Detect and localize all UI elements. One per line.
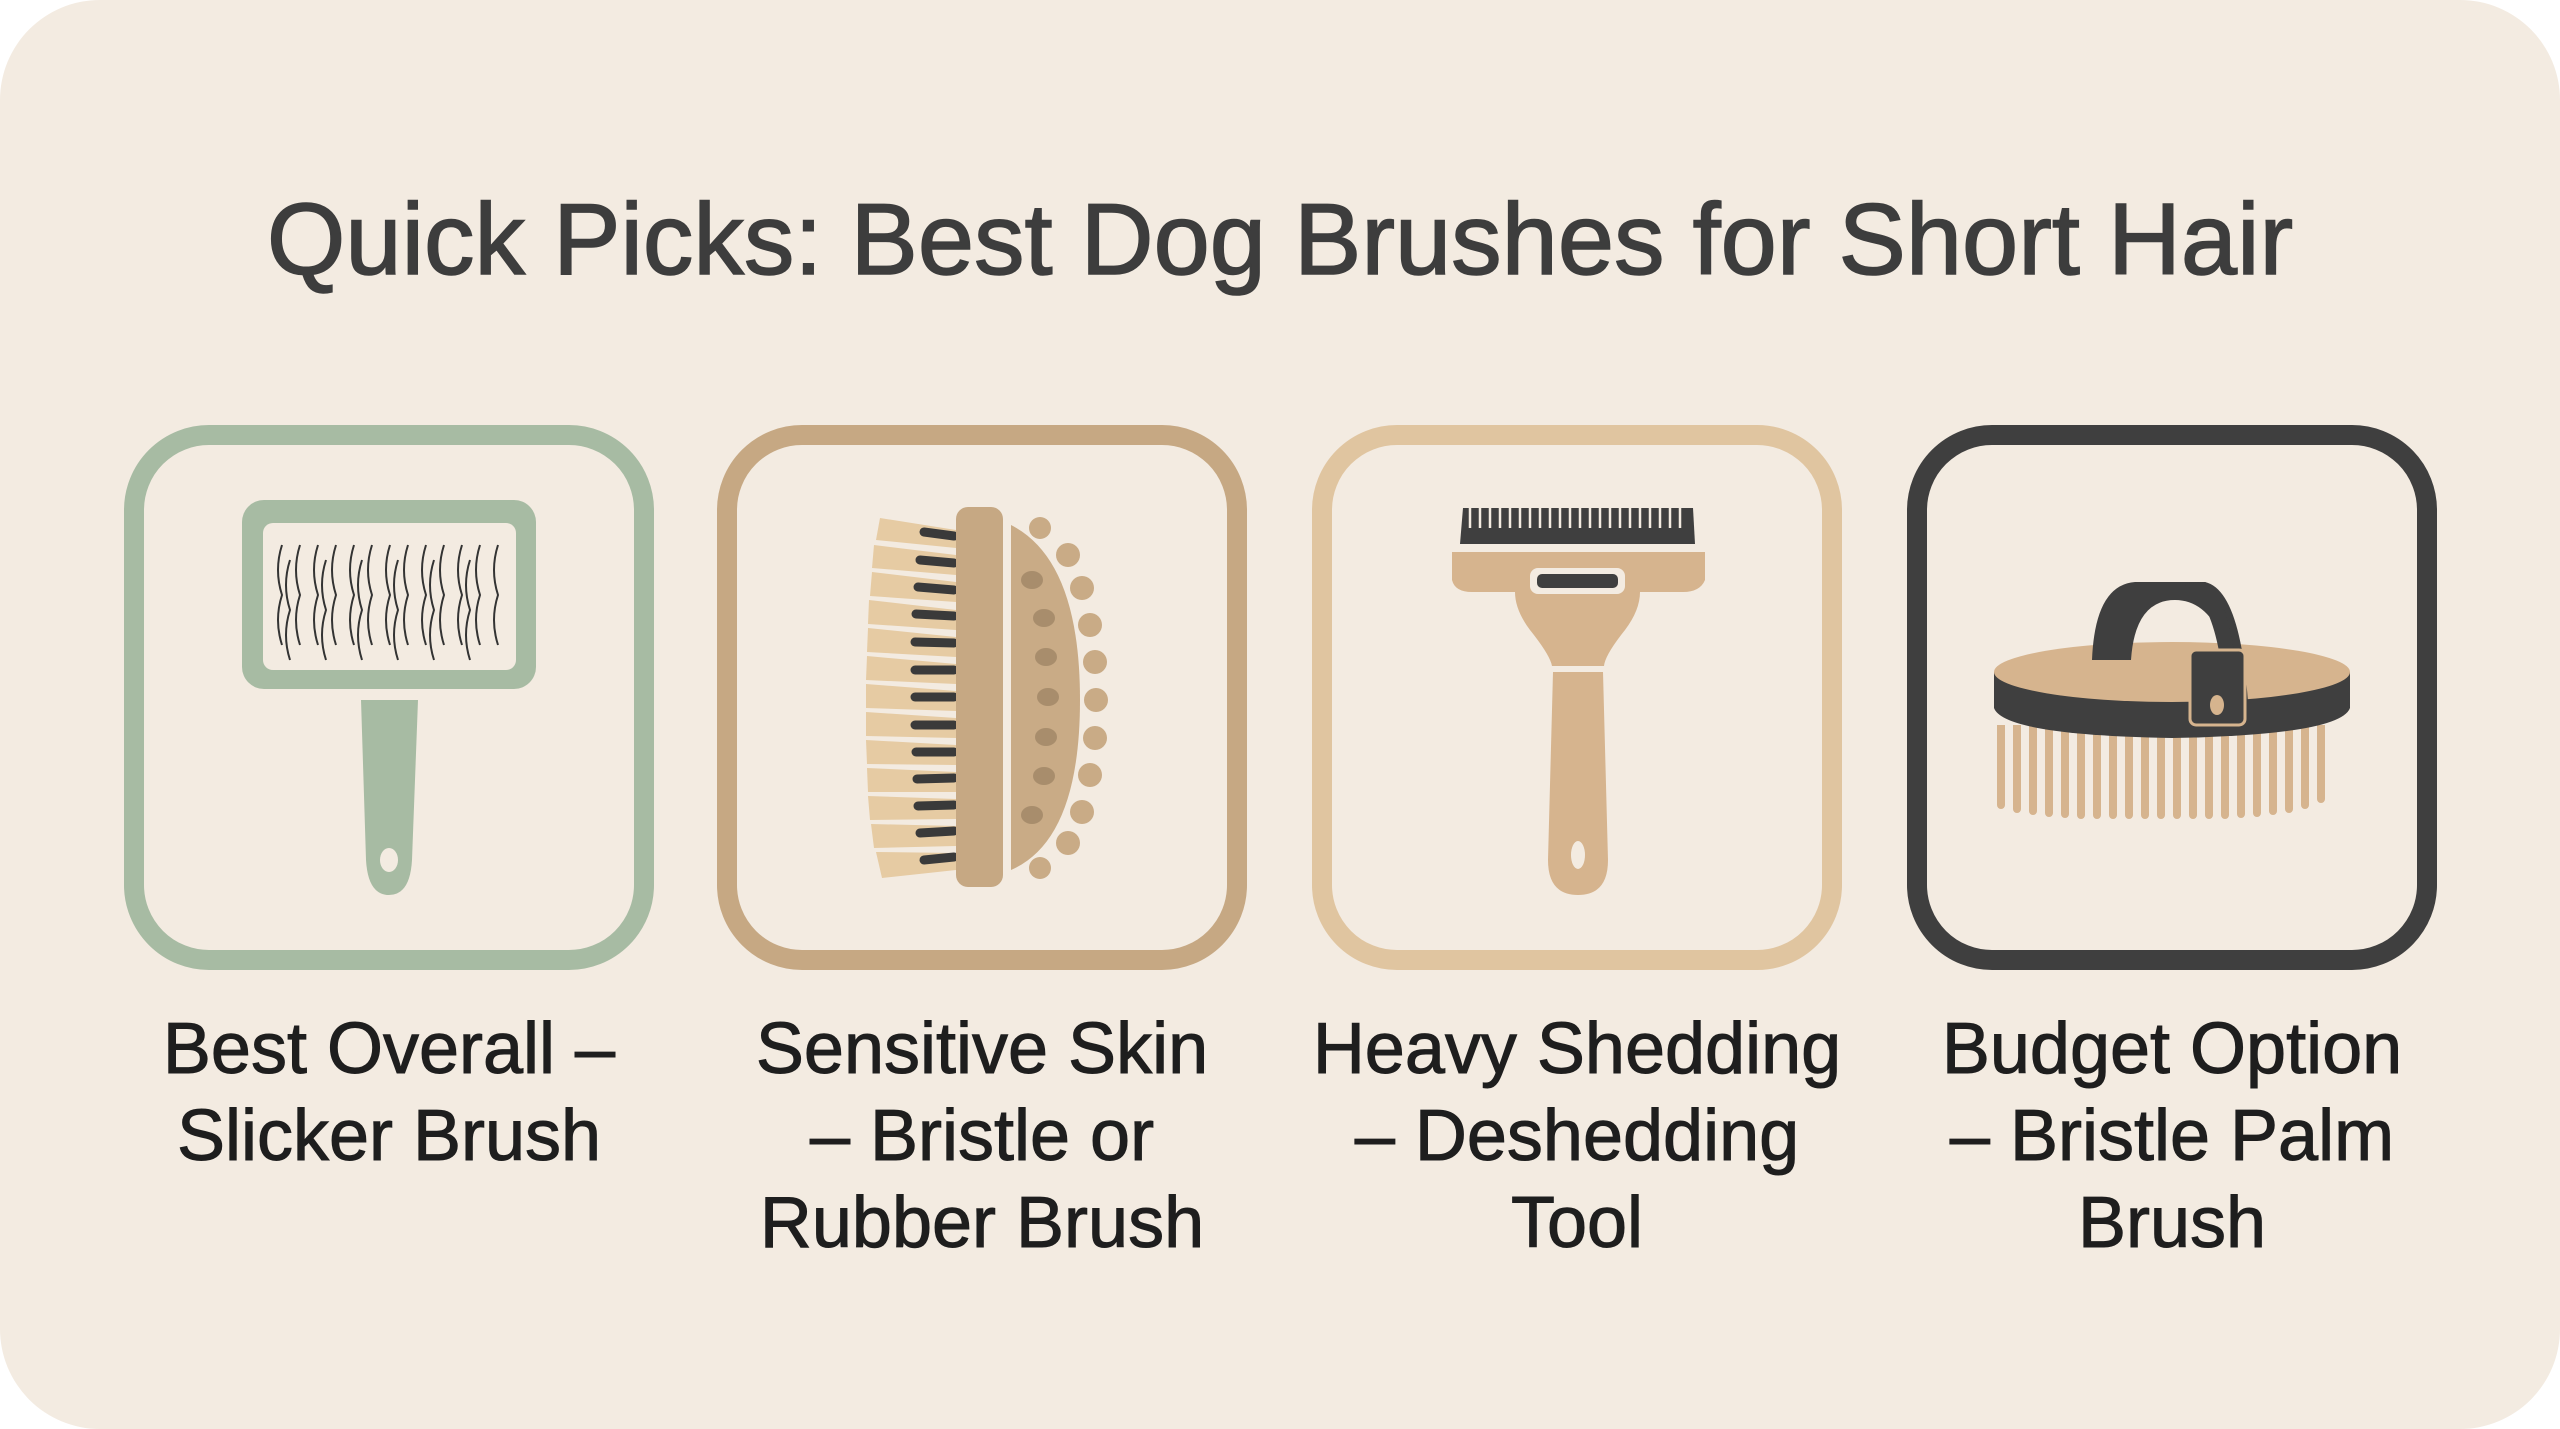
label: sensitive skin	[756, 1009, 1208, 1263]
icon: deshedding tool	[1452, 508, 1705, 895]
label: budget option: – Bristle Palm	[1950, 1096, 2394, 1176]
label: sensitive skin: Rubber Brush	[760, 1183, 1204, 1263]
label: budget option: Brush	[2078, 1183, 2266, 1263]
icon: bristle palm brush	[1994, 582, 2350, 819]
panel: deshedding frame	[1312, 425, 1842, 970]
label: best overall: Slicker Brush	[177, 1096, 601, 1176]
panel: palm brush frame	[1907, 425, 2437, 970]
label: sensitive skin: Sensitive Skin	[756, 1009, 1208, 1089]
label: best overall: Best Overall –	[163, 1009, 615, 1089]
label: heavy shedding	[1313, 1009, 1841, 1263]
label: budget option	[1942, 1009, 2402, 1263]
label: sensitive skin: – Bristle or	[810, 1096, 1154, 1176]
label: best overall	[163, 1009, 616, 1176]
label: heavy shedding: – Deshedding	[1355, 1096, 1799, 1176]
panel: bristle rubber frame	[717, 425, 1247, 970]
icon: slicker brush	[242, 500, 536, 895]
icon: bristle and rubber brush	[866, 507, 1108, 887]
label: budget option: Budget Option	[1942, 1009, 2402, 1089]
label: heavy shedding: Heavy Shedding	[1313, 1009, 1841, 1089]
title: Quick Picks: Best Dog Brushes for Short Hair	[267, 184, 2293, 296]
panel: slicker brush frame	[124, 425, 654, 970]
label: heavy shedding: Tool	[1511, 1183, 1643, 1263]
